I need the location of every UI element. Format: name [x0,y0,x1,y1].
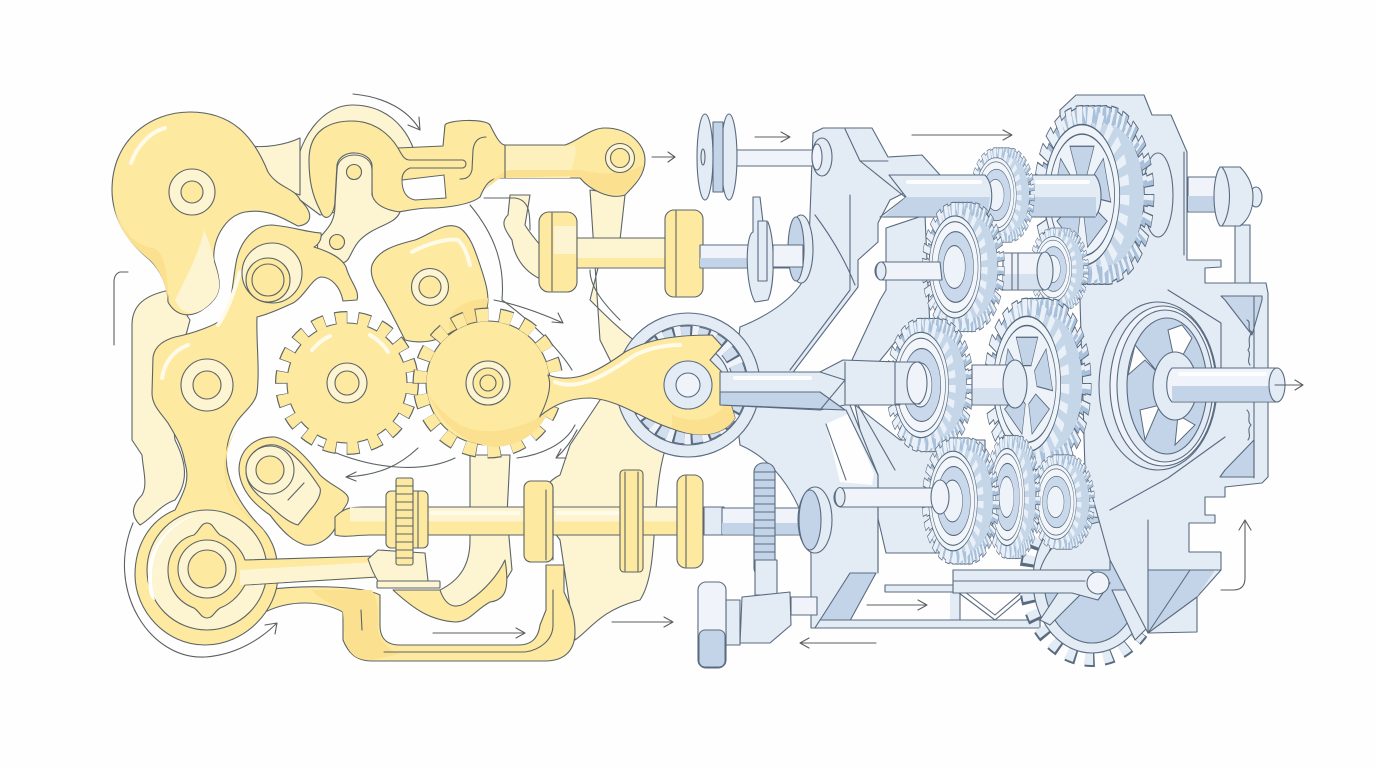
top right hub disc [1143,153,1173,237]
gear: lower middle [987,442,1038,552]
frame behind left gears [845,215,930,385]
lower yellow shaft with discs [335,470,703,572]
arrow: bottom middle [612,617,673,627]
lower gear shaft [834,480,949,514]
arrow: left bracket [114,272,128,345]
top right end shaft and disc [1188,167,1262,226]
left chain link [135,225,358,645]
bracket under shaft [368,550,440,588]
blue shaft with cam discs [700,197,813,302]
capsule cam [239,437,348,545]
gear: yellow left [282,318,412,448]
yellow crank arm [540,335,735,435]
bottom crank ring [147,510,378,630]
arrow: top curved [353,94,420,130]
lower pipe [265,565,575,661]
gear: yellow right with arm [420,314,556,452]
pale backing shapes [132,105,665,640]
centre blob [371,226,488,342]
blue frames [735,95,1268,660]
right main frame [1060,95,1268,633]
pulley wheel [1099,302,1217,470]
output shaft [1167,368,1285,402]
arrow: blue top short [755,132,790,142]
gear: large top right [1039,115,1149,275]
white window in lower frame [826,414,874,485]
gear: lower front [925,444,996,558]
arrow: output [1275,380,1303,390]
top shaft right segment [1030,175,1101,217]
upper yellow shaft with discs [539,210,703,297]
gear: lower back [1033,460,1092,544]
gear: centre right [989,307,1087,461]
arrow: blue lower back [800,638,876,648]
top shaft left segment [880,175,992,217]
arrow: bottom-left arc [124,523,277,657]
arrow: right upward [1221,520,1251,590]
pipe lines [318,198,620,467]
blue shaft from arm to centre gear [720,360,1027,410]
arrow: bottom pipe [433,628,525,638]
arrow: under left gear [346,448,418,481]
arrow: blue lower forward [867,600,927,610]
lever with pivot [953,570,1110,600]
gear: top small [973,153,1032,237]
bearing hub [664,361,712,409]
shaft into upper mid gear [875,262,942,280]
upper link arm [309,120,645,217]
shaft between upper gears [1003,252,1053,290]
gear: centre left [890,325,970,445]
pale key plate [317,155,400,264]
arrow: under right gear [556,430,577,458]
left blue shaft with double pulley [697,114,832,200]
gear: upper mid [926,209,1001,325]
bottom blue gear [1026,500,1158,660]
arrow: centre curve [494,300,563,323]
blue shaft with thin gear [704,463,832,577]
bottom left blue bracket and disc [698,560,817,668]
ball bearing [616,313,760,457]
yellow organic mechanism [112,105,703,661]
arrow: blue top long [912,130,1012,140]
strut right [1235,225,1250,283]
large round blob [112,112,310,315]
arrow: upper yellow right [652,152,675,162]
gear: mid right behind [1032,232,1086,306]
lower left frame [735,395,1040,628]
white window under gears [846,556,950,620]
top left bracket frame [735,128,940,390]
